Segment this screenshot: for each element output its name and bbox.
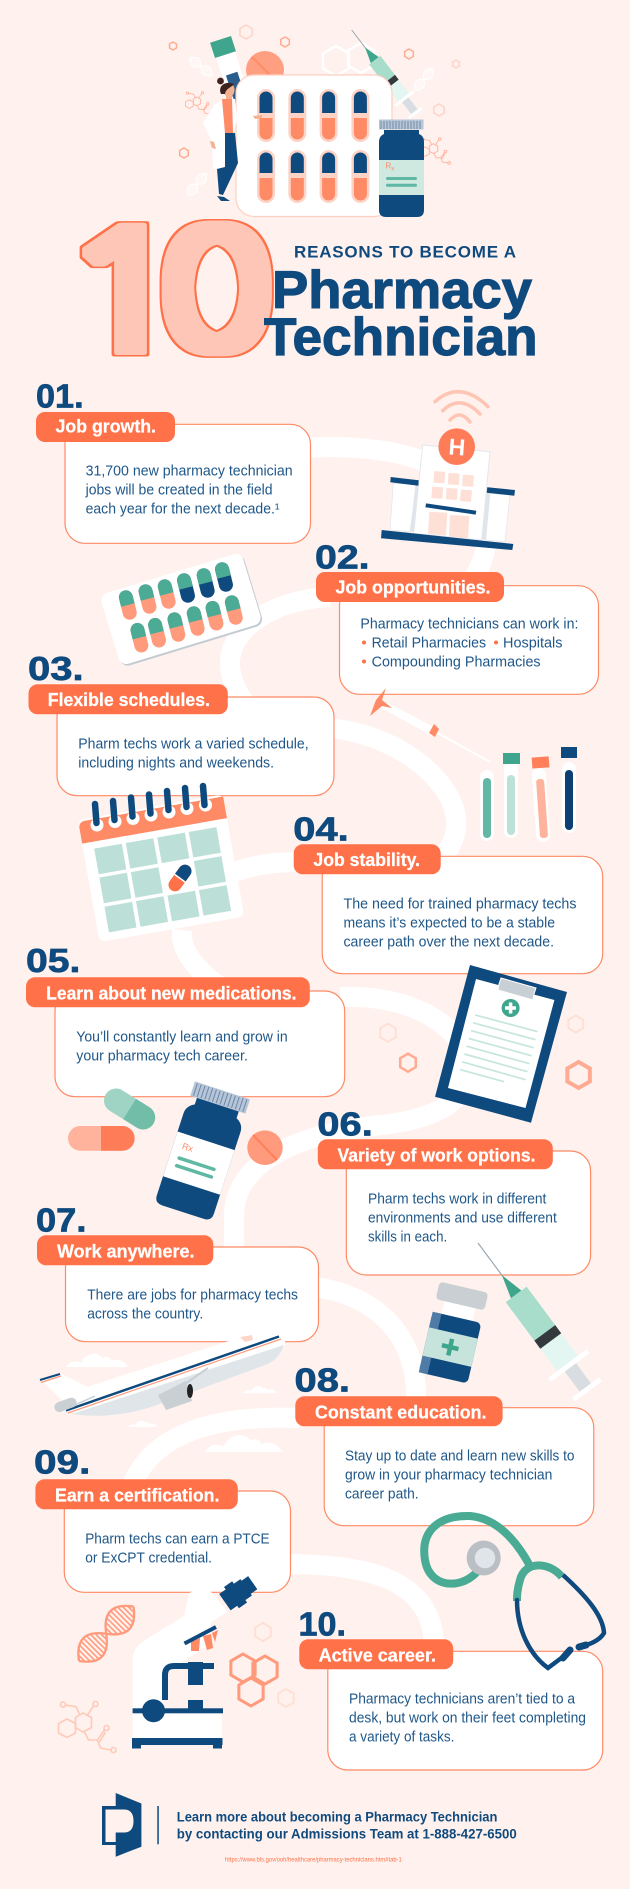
body text: a variety of tasks. bbox=[349, 1730, 454, 1746]
body text bbox=[76, 1029, 288, 1064]
logo bbox=[102, 1793, 141, 1857]
body text: There are jobs for pharmacy techs bbox=[87, 1287, 298, 1303]
body text: 31,700 new pharmacy technician bbox=[86, 463, 293, 479]
body text: Stay up to date and learn new skills to bbox=[345, 1448, 574, 1464]
icon: calendar bbox=[78, 786, 244, 942]
heading pill bbox=[299, 1639, 453, 1669]
panel: 08 constant education bbox=[294, 1362, 594, 1526]
heading pill: Job growth. bbox=[56, 417, 156, 437]
heading pill: Job stability. bbox=[313, 850, 420, 870]
panel: 05 learn about new medications bbox=[26, 943, 345, 1097]
panel: 09 earn a certification bbox=[34, 1445, 290, 1592]
body text: grow in your pharmacy technician bbox=[345, 1468, 552, 1484]
heading pill bbox=[37, 1235, 213, 1265]
body text bbox=[345, 1448, 574, 1503]
heading pill bbox=[26, 977, 310, 1007]
card bbox=[340, 586, 598, 694]
icon: DNA helix bbox=[70, 1597, 143, 1670]
icon: stethoscope bbox=[424, 1516, 604, 1668]
number: 07. bbox=[36, 1202, 86, 1239]
heading pill: Earn a certification. bbox=[55, 1485, 219, 1505]
body text bbox=[78, 736, 309, 771]
card bbox=[328, 1651, 603, 1770]
icon: capsules bbox=[68, 1084, 160, 1151]
number: 04. bbox=[293, 812, 349, 849]
panel: 04 job stability bbox=[293, 812, 603, 974]
body text bbox=[87, 1287, 298, 1322]
icon: clouds bbox=[66, 1354, 282, 1452]
heading pill: Flexible schedules. bbox=[48, 690, 210, 710]
heading pill: Job opportunities. bbox=[336, 577, 490, 597]
card bbox=[346, 1151, 591, 1275]
header hexagons and molecules bbox=[170, 25, 459, 198]
icon: pipette bbox=[370, 688, 490, 762]
number: 03. bbox=[28, 651, 84, 688]
body text: jobs will be created in the field bbox=[85, 483, 273, 499]
footer call to action: by contacting our Admissions Team at 1-888-427-6500 bbox=[177, 1827, 517, 1842]
footer call to action bbox=[177, 1810, 517, 1842]
card bbox=[65, 424, 310, 543]
body text bbox=[85, 1531, 270, 1566]
icon: test tube bbox=[210, 36, 258, 125]
body text: career path. bbox=[345, 1487, 419, 1503]
panel: 03 flexible schedules bbox=[28, 651, 334, 796]
icon: orange tablet bbox=[247, 1130, 283, 1165]
body text: your pharmacy tech career. bbox=[76, 1048, 248, 1064]
heading pill bbox=[318, 1139, 553, 1169]
body text: means it’s expected to be a stable bbox=[344, 916, 555, 932]
body text: The need for trained pharmacy techs bbox=[344, 896, 576, 912]
body text: career path over the next decade. bbox=[344, 935, 554, 951]
heading pill bbox=[295, 1396, 503, 1426]
card bbox=[64, 1491, 290, 1592]
icon: hospital with wifi bbox=[381, 392, 515, 550]
card bbox=[57, 697, 334, 796]
title line 2: Technician bbox=[264, 308, 538, 367]
body text: or ExCPT credential. bbox=[85, 1550, 212, 1566]
body text: Pharm techs work in different bbox=[368, 1191, 546, 1207]
big numeral 10: 0 bbox=[158, 153, 275, 398]
panel: 02 job opportunities bbox=[315, 539, 598, 694]
heading pill: Constant education. bbox=[315, 1402, 486, 1422]
body text: skills in each. bbox=[368, 1230, 447, 1246]
panel: 07 work anywhere bbox=[36, 1202, 318, 1342]
body text bbox=[349, 1691, 586, 1746]
icon: syringe bbox=[342, 23, 426, 121]
icon: tilted medicine bottle bbox=[154, 1081, 251, 1221]
icon: hospital with wifi: H bbox=[448, 433, 466, 461]
heading pill: Variety of work options. bbox=[338, 1145, 536, 1165]
footer call to action: Learn more about becoming a Pharmacy Technician bbox=[177, 1810, 497, 1825]
number: 06. bbox=[317, 1106, 373, 1143]
icon: microscope bbox=[132, 1572, 260, 1748]
card bbox=[322, 856, 603, 974]
body text: environments and use different bbox=[368, 1210, 557, 1226]
body text: desk, but work on their feet completing bbox=[349, 1711, 586, 1727]
number: 01. bbox=[36, 379, 84, 416]
icon: tilted medicine bottle: Rx bbox=[181, 1141, 195, 1154]
body text: including nights and weekends. bbox=[78, 755, 274, 771]
big numeral 10: 1 bbox=[58, 213, 193, 376]
body text: Hospitals bbox=[503, 635, 562, 651]
body text: each year for the next decade.¹ bbox=[86, 502, 280, 518]
icon: vial bbox=[419, 1282, 488, 1383]
footer bbox=[102, 1793, 517, 1864]
icon: test tubes bbox=[480, 747, 577, 842]
body text bbox=[360, 616, 578, 670]
heading pill bbox=[28, 684, 228, 714]
icon: medicine bottle: R bbox=[386, 162, 391, 170]
icon: hexagon cluster bbox=[231, 1623, 294, 1707]
heading pill bbox=[35, 1479, 238, 1509]
winding white path bbox=[132, 447, 487, 1645]
number: 08. bbox=[294, 1362, 350, 1399]
heading pill bbox=[36, 412, 175, 442]
panel: 10 active career bbox=[298, 1607, 603, 1770]
body text bbox=[85, 463, 293, 518]
header illustration bbox=[170, 23, 459, 217]
blister pack with capsules bbox=[236, 75, 392, 216]
figure: pharmacist bbox=[203, 78, 262, 201]
body text bbox=[344, 896, 576, 951]
icon: molecule bbox=[58, 1702, 116, 1752]
card bbox=[66, 1247, 318, 1342]
heading pill: Active career. bbox=[319, 1645, 436, 1665]
icon: airplane bbox=[40, 1335, 285, 1416]
number: 10. bbox=[298, 1607, 346, 1644]
icon: clipboard bbox=[435, 965, 567, 1123]
heading pill: Work anywhere. bbox=[57, 1241, 194, 1261]
icon: medicine bottle bbox=[379, 120, 424, 217]
number: 09. bbox=[34, 1445, 90, 1482]
icon: syringe bbox=[459, 1229, 608, 1406]
big numeral 10 bbox=[58, 153, 275, 398]
body text bbox=[368, 1191, 557, 1246]
panel: 01 job growth bbox=[36, 379, 310, 543]
body text: across the country. bbox=[87, 1306, 203, 1322]
source url: https://www.bls.gov/ooh/healthcare/pharmacy-technicians.htm#tab-1 bbox=[225, 1858, 402, 1864]
title block bbox=[58, 153, 538, 398]
card bbox=[324, 1408, 594, 1526]
body text: Retail Pharmacies bbox=[372, 635, 486, 651]
body text: Compounding Pharmacies bbox=[372, 654, 541, 670]
card bbox=[55, 991, 345, 1097]
icon: medicine bottle: x bbox=[391, 166, 394, 172]
body text: Pharmacy technicians can work in: bbox=[360, 616, 578, 632]
number: 05. bbox=[26, 943, 80, 980]
heading pill bbox=[294, 844, 441, 874]
body text: Pharmacy technicians aren’t tied to a bbox=[349, 1691, 576, 1707]
heading pill bbox=[316, 572, 504, 602]
icon: capsule blister card bbox=[99, 552, 264, 668]
number: 02. bbox=[315, 539, 370, 576]
body text: Pharm techs can earn a PTCE bbox=[85, 1531, 270, 1547]
heading pill: Learn about new medications. bbox=[46, 983, 297, 1003]
title line 1: Pharmacy bbox=[272, 261, 533, 320]
icon: round tablet bbox=[246, 51, 284, 89]
body text: Pharm techs work a varied schedule, bbox=[78, 736, 309, 752]
subtitle: REASONS TO BECOME A bbox=[294, 242, 516, 262]
panel: 06 variety of work options bbox=[317, 1106, 591, 1275]
body text: You’ll constantly learn and grow in bbox=[76, 1029, 288, 1045]
hexagons near clipboard bbox=[380, 1016, 590, 1088]
